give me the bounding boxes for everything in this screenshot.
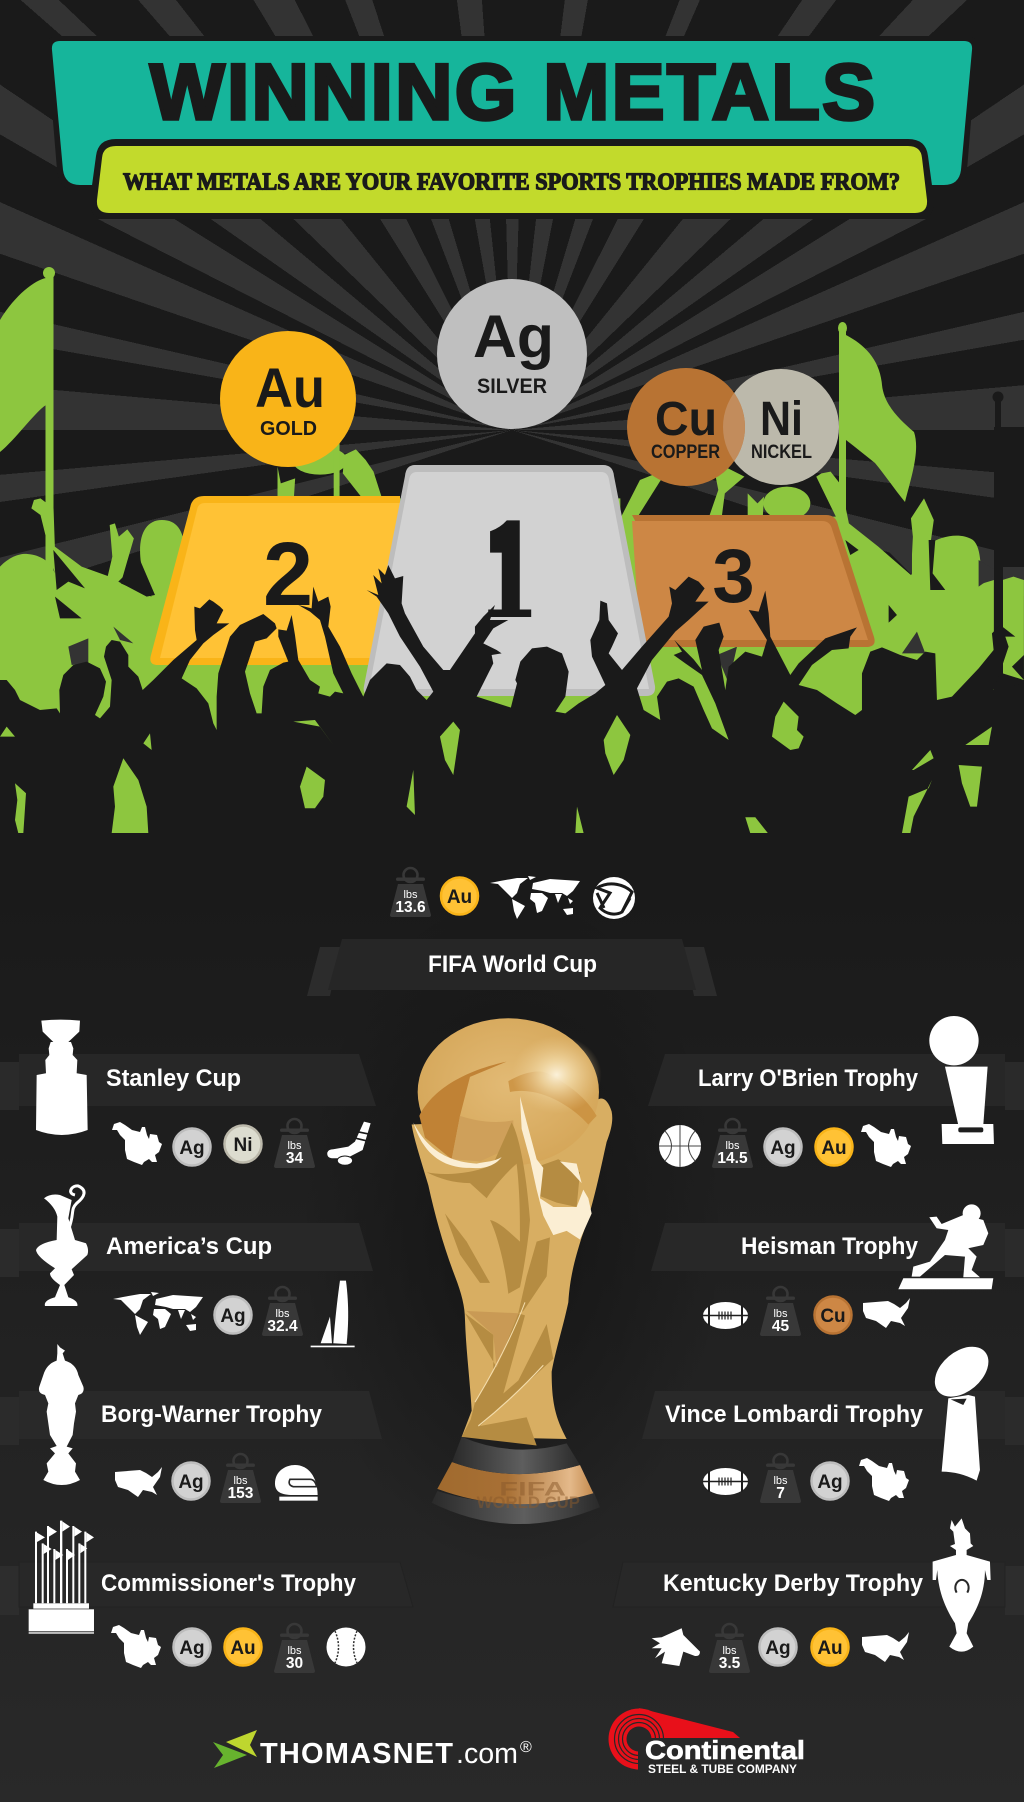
row: Stanley Cup [0,1020,376,1168]
icon: weight 7 lbs [760,1454,801,1503]
icon: weight 14.5 lbs: lbs [725,1140,740,1152]
logo: Thomasnet: ® [520,1739,532,1756]
logo mark [608,1708,740,1772]
icon: weight 3.5 lbs: 3.5 [719,1655,741,1672]
metal: nickel [723,369,839,485]
metal: silver: Ag [473,303,554,370]
trophy: Commissioner's [29,1521,94,1634]
badge: silver [812,1462,848,1500]
logo: Thomasnet [213,1730,532,1770]
badge: copper [814,1296,852,1334]
subtitle banner [90,139,934,219]
podium: 3rd place copper: 3 [712,534,755,619]
metal: copper: Cu [655,393,717,446]
icon: soccer ball [593,877,635,919]
metal: copper [627,368,745,486]
ribbon: Vince Lombardi Trophy [665,1401,924,1428]
badge: silver: Ag [178,1472,204,1493]
badge: gold: Au [821,1138,847,1159]
icon: North America [112,1122,162,1165]
icon: weight 30 lbs: 30 [286,1655,303,1672]
icon: USA map [862,1632,909,1662]
badge: silver [174,1628,210,1666]
ribbon: Larry O'Brien Trophy [698,1065,919,1092]
metal: copper: COPPER [651,442,720,463]
trophy: FIFA World Cup [412,1018,612,1524]
silhouette: front crowd, left [0,565,513,835]
badge: gold: Au [447,887,472,908]
row: America's Cup [0,1186,373,1347]
trophy base: WORLD CUP [477,1494,580,1512]
badge: nickel: Ni [234,1135,252,1156]
logo: Continental: STEEL & TUBE COMPANY [648,1764,797,1776]
icon: weight 153 lbs: 153 [228,1485,254,1502]
icon: weight 3.5 lbs: lbs [722,1645,737,1657]
badge: silver [172,1462,210,1500]
badge: gold [812,1628,848,1666]
icon: hockey stick and puck [327,1122,371,1165]
trophy: Stanley Cup [36,1020,88,1135]
metal: silver [437,279,587,429]
podium: 3rd place copper [632,515,875,647]
row: Larry O'Brien Trophy [648,1016,1024,1168]
icon: weight 14.5 lbs [712,1119,753,1168]
icon: USA map [863,1298,910,1328]
trophy: Kentucky Derby [933,1518,991,1652]
trophy: Borg-Warner [39,1344,84,1485]
icon: baseball [326,1628,366,1666]
trophy glow [302,890,722,1570]
flag: right [838,322,916,588]
badge: silver: Ag [817,1472,843,1493]
badge: silver: Ag [770,1138,796,1159]
trophy highlights [413,1096,592,1239]
gaps in back crowd, left [53,550,155,665]
icon: weight 45 lbs [760,1287,801,1336]
podium: 2nd place gold: 2 [263,525,313,625]
metal: silver: SILVER [477,375,547,398]
ribbon: Borg-Warner Trophy [101,1401,323,1428]
logo: Continental: Continental [645,1735,805,1765]
trophy: Heisman [898,1204,993,1289]
ribbon [0,1391,382,1445]
ribbon [0,1562,413,1615]
icon: weight 7 lbs: 7 [776,1485,785,1502]
ribbon [0,1223,373,1277]
icon: weight 30 lbs: lbs [287,1645,302,1657]
ribbon: Commissioner's Trophy [101,1570,357,1597]
icon: weight 34 lbs: 34 [286,1150,303,1167]
icon: weight 153 lbs [220,1454,261,1503]
subtitle text: WHAT METALS ARE YOUR FAVORITE SPORTS TROPHIES MADE FROM? [123,170,900,196]
ribbon: America’s Cup [106,1233,272,1260]
logo: Thomasnet: .com [456,1738,518,1770]
badge: gold: Au [230,1638,256,1659]
icon: weight 34 lbs [274,1119,315,1168]
icon: weight 153 lbs: lbs [233,1475,248,1487]
icon: weight 34 lbs: lbs [287,1140,302,1152]
ribbon: FIFA World Cup [307,939,717,996]
dark flag [992,392,1024,690]
icon: world map [490,876,580,919]
logo: Thomasnet: THOMASNET [260,1738,453,1770]
icon: racing helmet [275,1465,318,1501]
green crowd and flags [0,267,1024,833]
icon: weight 13.6 lbs [390,868,431,917]
gaps in back crowd, right [717,540,1024,725]
ribbon: Heisman Trophy [741,1233,919,1260]
icon: weight 30 lbs [274,1624,315,1673]
metal: nickel: NICKEL [751,442,812,463]
ribbon [651,1223,1024,1277]
ball [418,1018,602,1166]
row: Kentucky Derby Trophy [613,1518,1024,1673]
badge: silver [760,1628,796,1666]
icon: sailboat [311,1281,355,1347]
flag: left [0,267,55,673]
badge: silver: Ag [179,1638,205,1659]
badge: gold [441,878,478,914]
badge: silver [764,1128,802,1166]
ribbon: Kentucky Derby Trophy [663,1570,924,1597]
badge: silver: Ag [765,1638,791,1659]
icon: weight 45 lbs: lbs [773,1308,788,1320]
icon: football [703,1468,748,1495]
badge: silver [174,1128,210,1166]
row: Vince Lombardi Trophy [642,1337,1024,1503]
podium: 1st place silver [364,458,655,696]
trophy: Vince Lombardi [925,1337,998,1481]
icon: basketball [659,1125,701,1167]
podium: 1st place silver: 1 [483,458,535,679]
row: Borg-Warner Trophy [0,1344,382,1503]
icon: weight 13.6 lbs: lbs [403,889,418,901]
badge: gold [224,1628,262,1666]
trophy body [412,1098,612,1439]
metal: gold [220,331,356,467]
icon: North America [861,1124,911,1167]
icon: USA map [115,1467,162,1497]
icon: weight 7 lbs: lbs [773,1475,788,1487]
row: Commissioner's Trophy [0,1521,413,1673]
title banner [47,36,977,191]
FIFA World Cup icons [390,868,635,919]
icon: weight 32.4 lbs [262,1287,303,1336]
icon: weight 32.4 lbs: lbs [275,1308,290,1320]
icon: North America [111,1625,161,1668]
ribbon: Stanley Cup [106,1065,241,1092]
logo mark [213,1730,257,1768]
silhouette: back crowd [0,440,1024,833]
badge: gold [816,1128,852,1166]
icon: football [703,1302,748,1329]
icon: horse head [652,1628,700,1666]
badge: copper: Cu [820,1306,846,1327]
logo: Continental [608,1708,805,1776]
metal: gold: Au [255,356,325,419]
metal: gold: GOLD [260,418,317,440]
ribbon [613,1562,1024,1615]
icon: weight 13.6 lbs: 13.6 [395,899,426,916]
badge: nickel [224,1126,262,1162]
trophy: America's Cup [36,1186,88,1306]
row: Heisman Trophy [651,1204,1024,1336]
icon: weight 45 lbs: 45 [772,1318,789,1335]
badge: gold: Au [817,1638,843,1659]
icon: weight 32.4 lbs: 32.4 [267,1318,298,1335]
trophy: Larry O'Brien [929,1016,994,1144]
silhouette: front crowd, right [511,577,1024,835]
metal: nickel: Ni [760,393,803,446]
badge: silver [214,1296,252,1334]
icon: world map [113,1292,203,1335]
title text: WINNING METALS [150,47,875,136]
trophy folds [427,1122,580,1445]
trophy base: FIFA [499,1479,566,1500]
trophy base [432,1437,600,1524]
ribbon: FIFA World Cup: FIFA World Cup [428,951,597,978]
ribbon [642,1391,1024,1445]
icon: North America [859,1458,909,1501]
badge: silver: Ag [179,1138,205,1159]
podium: 2nd place gold [150,496,400,665]
ribbon [648,1054,1024,1110]
ribbon [0,1054,376,1110]
icon: weight 14.5 lbs: 14.5 [717,1150,748,1167]
icon: weight 3.5 lbs [709,1624,750,1673]
badge: silver: Ag [220,1306,246,1327]
